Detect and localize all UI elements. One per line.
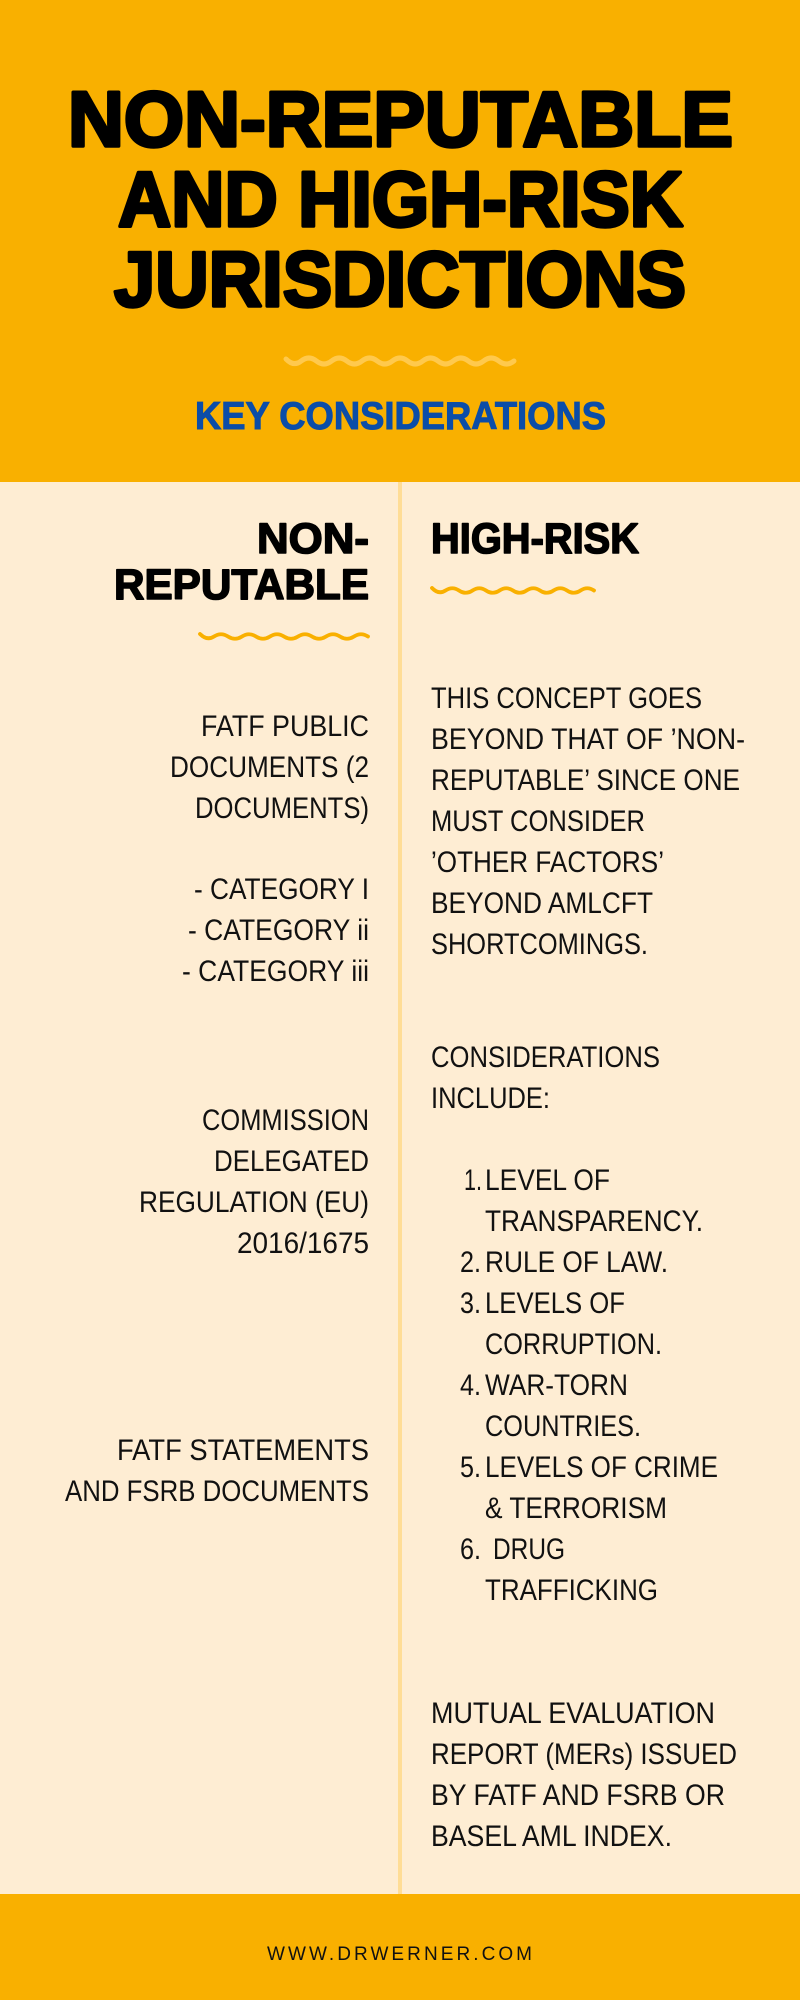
text: concept description: THIS CONCEPT GOES [431, 682, 702, 715]
text: concept description: MUST CONSIDER [431, 805, 645, 838]
text: mutual evaluation report: BASEL AML INDEX. [431, 1820, 672, 1853]
panel: high-risk column [431, 515, 745, 1853]
title [68, 75, 733, 323]
text: concept description: REPUTABLE’ SINCE ONE [431, 764, 740, 797]
subtitle: KEY CONSIDERATIONS [195, 395, 606, 438]
numbered list: CORRUPTION. [485, 1328, 662, 1361]
heading: non-reputable [114, 515, 369, 609]
numbered list: 4. [460, 1369, 481, 1402]
numbered list: 2. [460, 1246, 481, 1279]
text: mutual evaluation report [431, 1697, 737, 1853]
heading: high-risk: HIGH-RISK [431, 515, 639, 563]
numbered list [460, 1164, 718, 1607]
numbered list: 5. [460, 1451, 481, 1484]
squiggle: high-risk [432, 588, 594, 593]
text: FATF public documents: DOCUMENTS (2 [170, 751, 369, 784]
column divider [398, 482, 402, 1894]
text: concept description: BEYOND AMLCFT [431, 887, 653, 920]
text: commission delegated regulation: DELEGATED [214, 1145, 369, 1178]
numbered list: & TERRORISM [485, 1492, 667, 1525]
text: FATF statements and FSRB documents: AND FSRB DOCUMENTS [65, 1475, 369, 1508]
numbered list: 1. [464, 1164, 482, 1197]
text: FATF public documents: - CATEGORY iii [182, 955, 369, 988]
numbered list: TRANSPARENCY. [485, 1205, 703, 1238]
numbered list: RULE OF LAW. [485, 1246, 668, 1279]
text: commission delegated regulation: REGULATION (EU) [139, 1186, 369, 1219]
numbered list: TRAFFICKING [485, 1574, 658, 1607]
text: considerations include: CONSIDERATIONS [431, 1041, 660, 1074]
numbered list: LEVEL OF [485, 1164, 610, 1197]
numbered list: LEVELS OF CRIME [485, 1451, 718, 1484]
title: AND HIGH-RISK [118, 155, 683, 243]
text: FATF public documents: FATF PUBLIC [201, 710, 369, 743]
numbered list: WAR-TORN [485, 1369, 628, 1402]
text: FATF public documents [170, 710, 369, 988]
heading: non-reputable: NON- [257, 515, 369, 563]
footer band [0, 1894, 800, 2000]
text: considerations include [431, 1041, 660, 1115]
numbered list: DRUG [493, 1533, 565, 1566]
title squiggle [286, 358, 514, 364]
text: mutual evaluation report: BY FATF AND FSRB OR [431, 1779, 725, 1812]
numbered list: COUNTRIES. [485, 1410, 641, 1443]
text: FATF public documents: DOCUMENTS) [195, 792, 369, 825]
squiggle: non-reputable [200, 634, 368, 639]
footer url: WWW.DRWERNER.COM [267, 1944, 532, 1965]
title: NON-REPUTABLE [68, 75, 733, 163]
text: concept description: ’OTHER FACTORS’ [431, 846, 664, 879]
text: concept description: BEYOND THAT OF ’NON- [431, 723, 745, 756]
text: commission delegated regulation: 2016/1675 [237, 1227, 369, 1260]
text: FATF public documents: - CATEGORY ii [188, 914, 369, 947]
text: FATF statements and FSRB documents: FATF STATEMENTS [117, 1434, 369, 1467]
text: FATF public documents: - CATEGORY I [194, 873, 369, 906]
header band [0, 0, 800, 482]
numbered list: LEVELS OF [485, 1287, 625, 1320]
text: mutual evaluation report: MUTUAL EVALUATION [431, 1697, 715, 1730]
text: concept description: SHORTCOMINGS. [431, 928, 648, 961]
heading: non-reputable: REPUTABLE [114, 561, 369, 609]
text: commission delegated regulation: COMMISSION [202, 1104, 369, 1137]
text: concept description [431, 682, 745, 961]
text: considerations include: INCLUDE: [431, 1082, 550, 1115]
numbered list: 3. [460, 1287, 481, 1320]
title: JURISDICTIONS [114, 235, 686, 323]
numbered list: 6. [460, 1533, 481, 1566]
text: commission delegated regulation [139, 1104, 369, 1260]
text: mutual evaluation report: REPORT (MERs) ISSUED [431, 1738, 737, 1771]
text: FATF statements and FSRB documents [65, 1434, 369, 1508]
panel: non-reputable column [65, 515, 369, 1508]
